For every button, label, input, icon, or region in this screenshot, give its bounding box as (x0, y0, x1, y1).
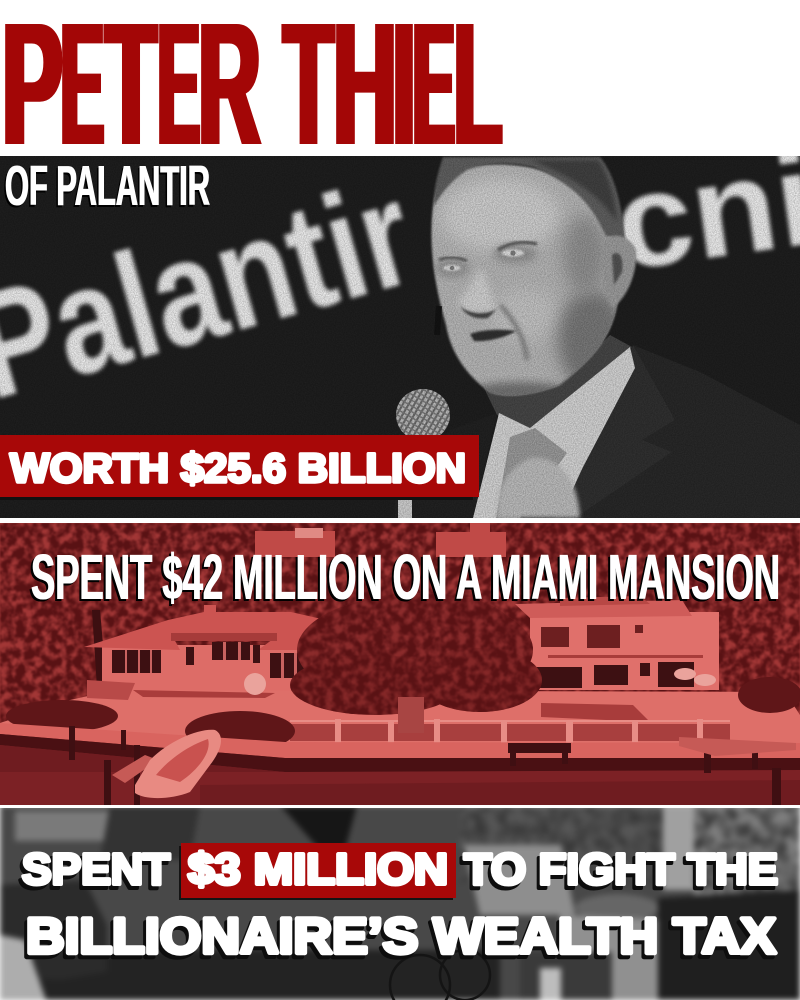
neck and collar (473, 335, 635, 518)
trees behind (0, 523, 800, 738)
left house (84, 605, 326, 695)
suit (574, 345, 800, 518)
right house windows (541, 625, 643, 648)
headline text: TO FIGHT THE (464, 845, 778, 894)
pedestrian (464, 845, 575, 915)
subtitle: OF PALANTIR (5, 154, 210, 218)
backdrop sign lettering (0, 156, 800, 400)
headline text: BILLIONAIRE’S WEALTH TAX (26, 908, 776, 964)
patio and terrace (0, 668, 800, 745)
panel heading: wealth tax (22, 843, 778, 964)
left dock deck (112, 755, 152, 783)
distant houses (255, 523, 506, 557)
mouth (470, 330, 516, 341)
highlighted amount: $3 MILLION (188, 845, 448, 894)
right dock deck (679, 737, 796, 756)
right house (515, 596, 719, 690)
headline text: SPENT (22, 845, 170, 894)
panel: Miami mansion photo (0, 523, 800, 805)
bushes (6, 677, 800, 742)
ear (602, 236, 636, 307)
panel: portrait photo (0, 124, 800, 518)
nose (458, 270, 495, 313)
motorboat (135, 730, 221, 798)
terrace railing posts (290, 719, 730, 744)
central tree (290, 593, 542, 715)
callout: net worth (0, 435, 479, 500)
bicycle wheels (390, 950, 490, 1000)
head (431, 157, 636, 402)
palm trunk (92, 610, 103, 681)
headline text (22, 845, 778, 964)
title (2, 0, 502, 181)
eyes and brows (439, 257, 467, 261)
highlight box (179, 843, 456, 900)
seawall and water (0, 723, 800, 805)
panel: street photo (0, 805, 800, 1000)
tree trunk (398, 697, 424, 724)
headset mic (437, 306, 439, 335)
callout: net worth: WORTH $25.6 BILLION (10, 445, 466, 491)
parked car (0, 880, 107, 980)
left house windows (112, 642, 306, 678)
microphone (396, 389, 450, 518)
docks and posts (69, 726, 781, 805)
